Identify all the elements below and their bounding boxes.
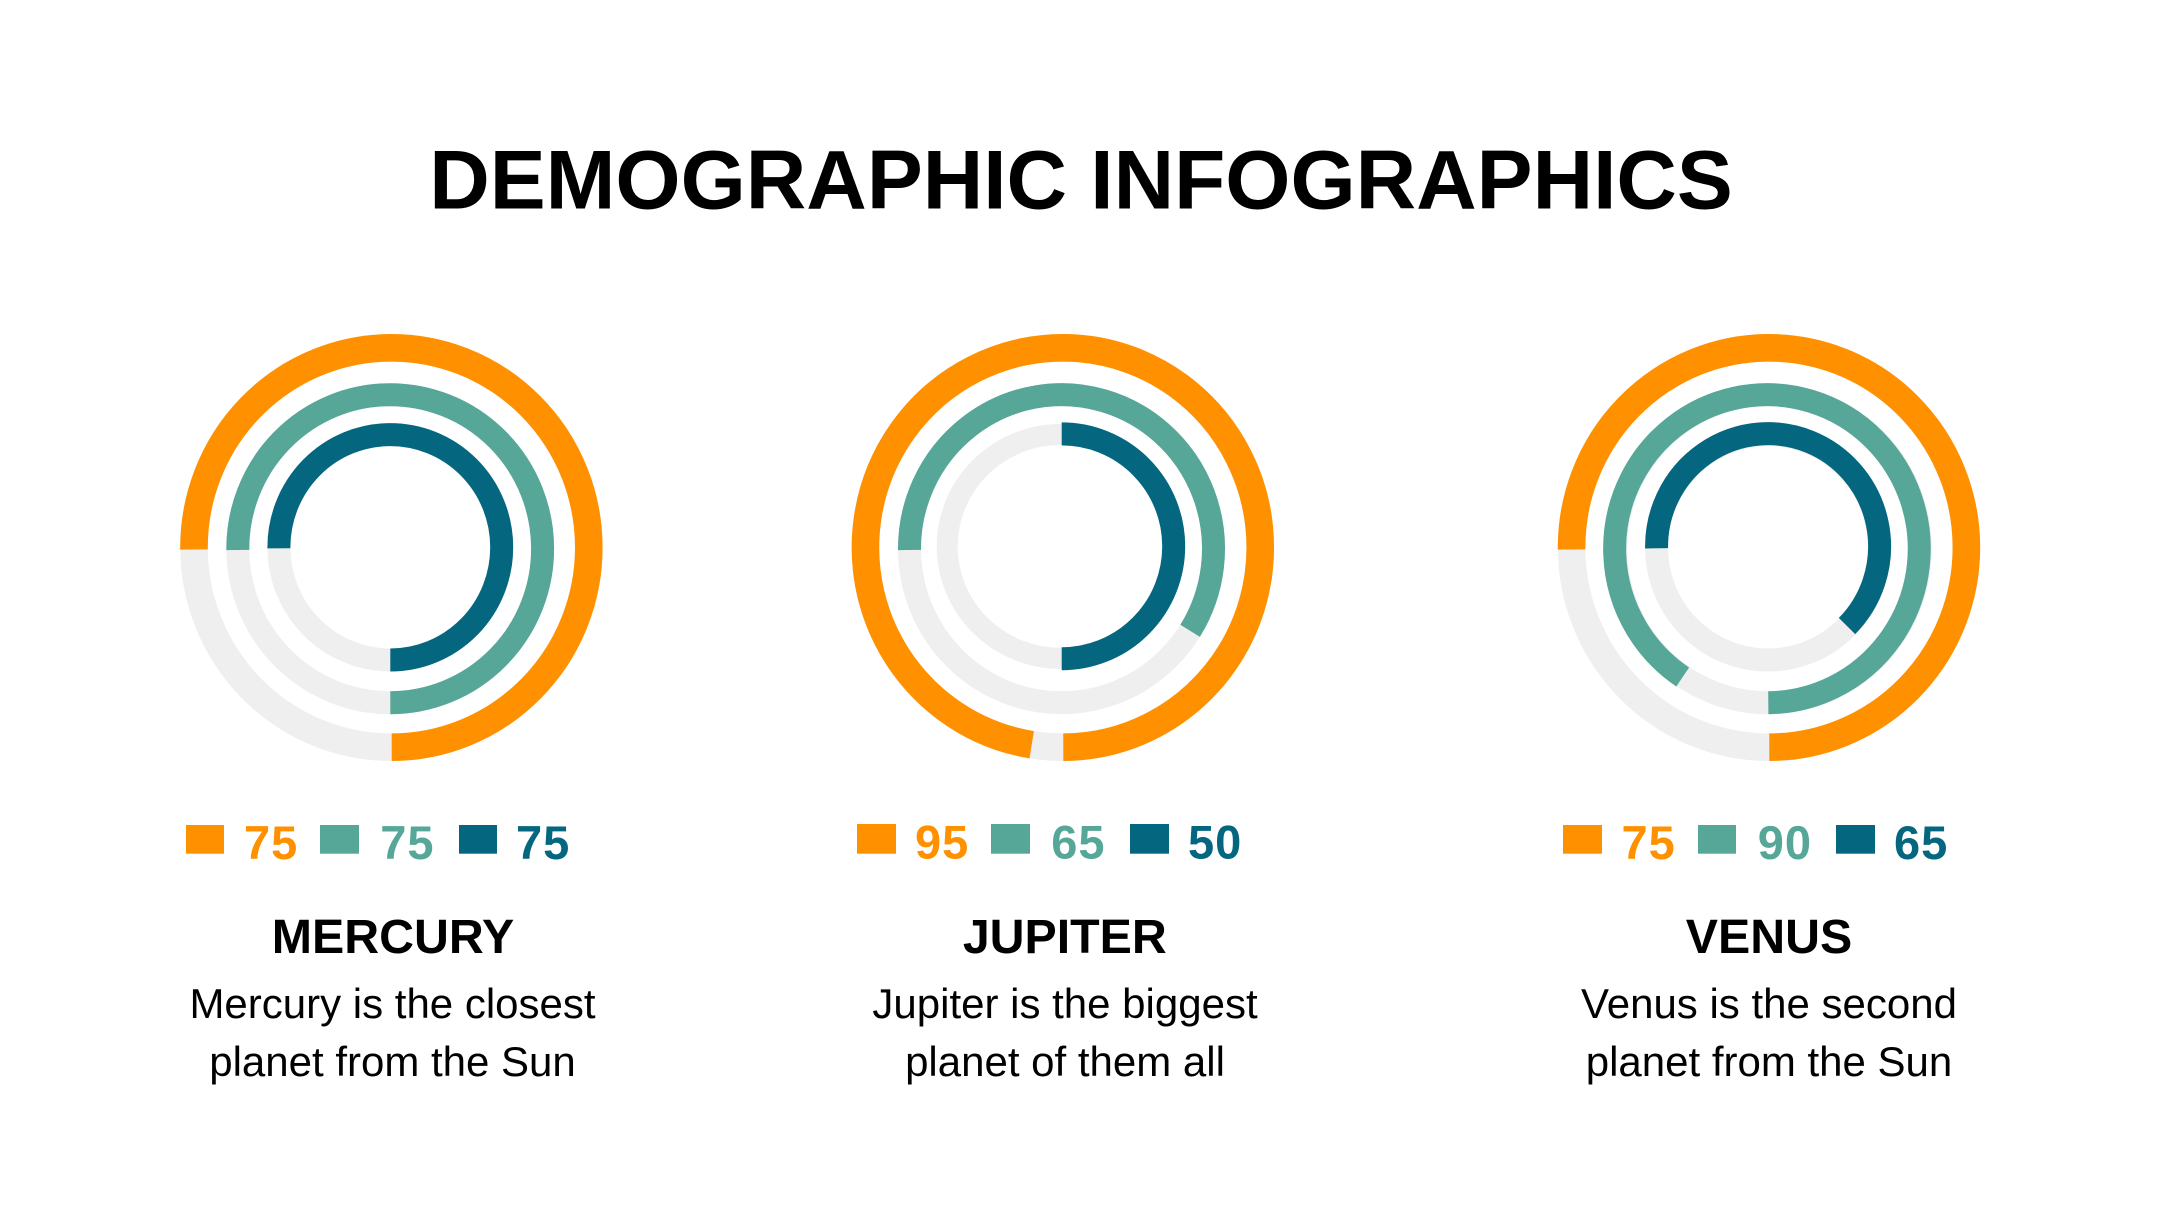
panel: Mercury (186, 348, 596, 1085)
radial chart: Venus (1572, 348, 1966, 747)
legend: Jupiter values: 95 (915, 816, 969, 868)
panel: Jupiter (857, 348, 1260, 1085)
heading: Jupiter: JUPITER (963, 910, 1167, 964)
text: Venus description: planet from the Sun (1586, 1038, 1952, 1085)
legend: Jupiter values: 65 (1051, 816, 1106, 868)
legend: Jupiter values: 50 (1188, 816, 1242, 868)
legend: Venus values (1563, 816, 1948, 869)
radial chart: Mercury (194, 348, 589, 747)
text: Venus description (1581, 980, 1957, 1085)
heading: Venus: VENUS (1686, 910, 1852, 964)
radial chart: Jupiter (865, 348, 1260, 747)
text: Mercury description (189, 980, 596, 1085)
legend: Mercury values: 75 (516, 816, 570, 869)
text: Mercury description: Mercury is the closest (189, 980, 596, 1027)
legend: Mercury values: 75 (244, 816, 298, 869)
legend: Mercury values (186, 816, 570, 869)
legend: Venus values: 75 (1622, 816, 1676, 869)
text: Venus description: Venus is the second (1581, 980, 1957, 1027)
legend: Venus values: 65 (1894, 816, 1948, 869)
legend: Jupiter values (857, 816, 1242, 868)
text: Jupiter description: Jupiter is the biggest (872, 980, 1258, 1027)
text: Jupiter description (872, 980, 1258, 1085)
heading: Mercury: MERCURY (272, 910, 514, 964)
text: Jupiter description: planet of them all (905, 1038, 1225, 1085)
text: Mercury description: planet from the Sun (209, 1038, 576, 1085)
title: DEMOGRAPHIC INFOGRAPHICS (429, 132, 1733, 226)
legend: Venus values: 90 (1758, 816, 1812, 869)
legend: Mercury values: 75 (380, 816, 435, 869)
panel: Venus (1563, 348, 1966, 1085)
